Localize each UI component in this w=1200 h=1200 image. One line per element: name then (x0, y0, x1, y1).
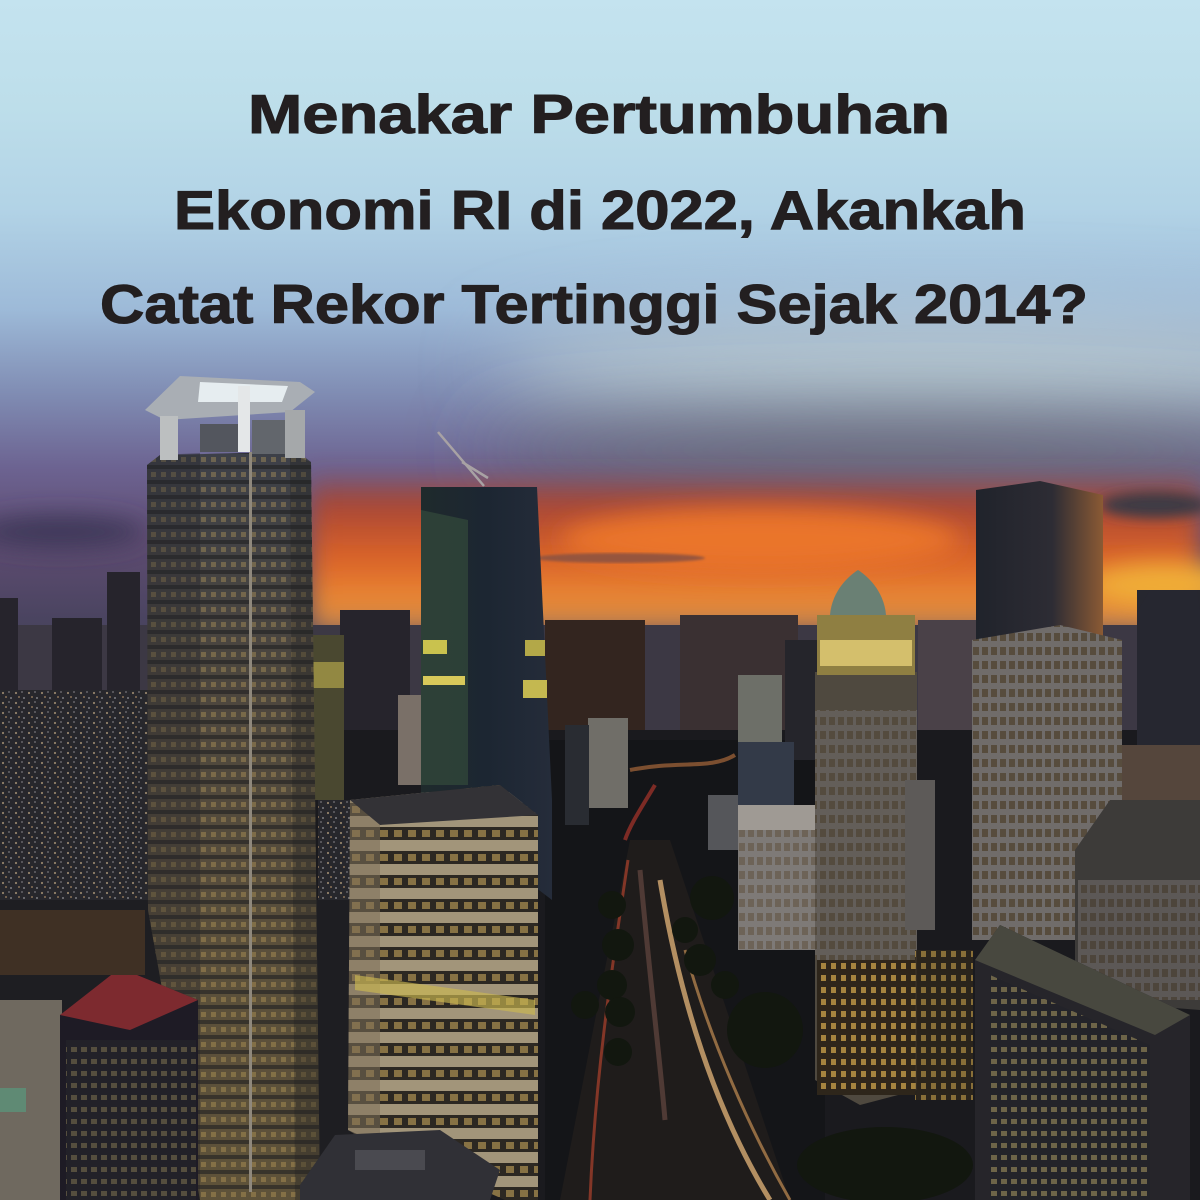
bottom low-rise rooftop (300, 1130, 500, 1200)
hazy horizon band (0, 625, 1200, 745)
far right tower and low rise (1075, 590, 1200, 1010)
beige foreground office block (348, 785, 538, 1200)
distant city skyline (0, 572, 1200, 755)
dense city lights ground (0, 690, 1200, 1200)
title (100, 83, 1088, 335)
road with light trails (560, 755, 790, 1200)
right glass tower (972, 481, 1122, 940)
foreground dark building lower right (975, 925, 1190, 1200)
glass tower with crane (421, 432, 552, 900)
domed tower (815, 570, 973, 1105)
street trees (571, 876, 973, 1200)
red lit building lower left (0, 910, 198, 1200)
title line 1: Menakar Pertumbuhan (248, 83, 950, 145)
title line 2: Ekonomi RI di 2022, Akankah (174, 179, 1026, 241)
sunset glow (0, 470, 1200, 635)
mid-ground towers behind road (312, 635, 820, 825)
white mid-rise building (708, 795, 816, 950)
main tall tower (147, 452, 320, 1200)
title line 3: Catat Rekor Tertinggi Sejak 2014? (100, 273, 1088, 335)
sky background (0, 0, 1200, 720)
tower crown (145, 376, 315, 460)
